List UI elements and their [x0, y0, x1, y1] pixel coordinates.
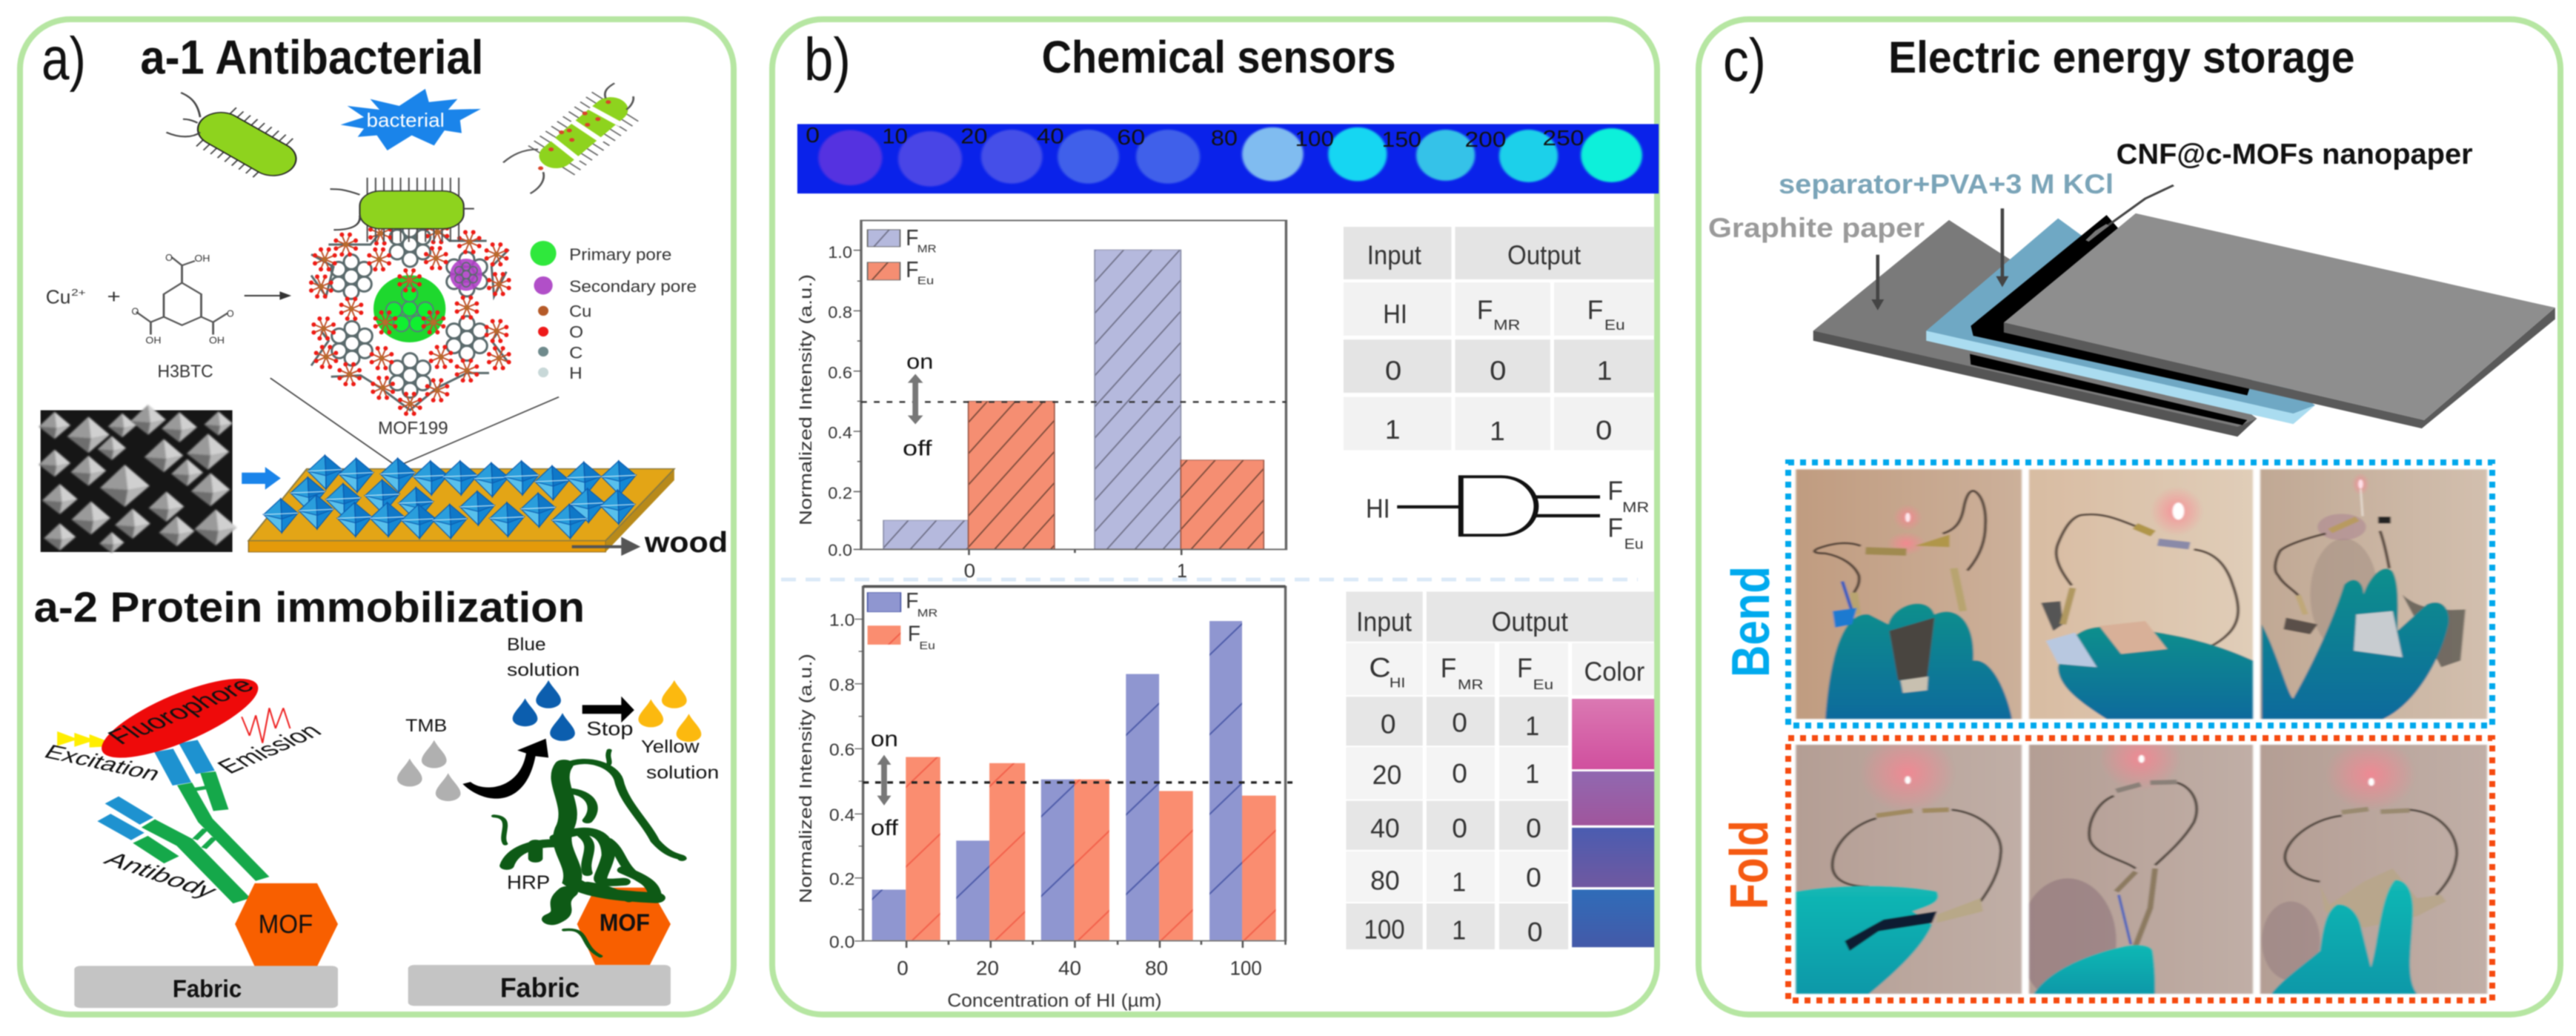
bar chart: logic outputs at HI 0 and 1: 0.4 [828, 424, 852, 442]
shape: Fabric left: Fabric [173, 975, 242, 1003]
image: fluorescence well strip with concentrations: 60 [1117, 125, 1145, 149]
reaction: Cu2+ plus H3BTC: OH [194, 253, 210, 264]
table: concentration truth table with color swatches: 1 [1452, 914, 1466, 945]
bar chart: logic outputs at HI 0 and 1: 0.6 [828, 363, 852, 382]
group: lower sensor content [829, 560, 1654, 1011]
reaction: Cu2+ plus H3BTC: Cu [46, 287, 70, 308]
icon: bacterium on MOF [330, 189, 474, 230]
legend: pore and atom key: Secondary pore [569, 277, 697, 296]
bar chart: logic outputs at HI 0 and 1: off [903, 436, 932, 460]
table: concentration truth table with color swatches: 80 [1370, 865, 1400, 895]
image: fluorescence well strip with concentrations [797, 123, 1659, 193]
table: two-state truth table: HI [1383, 299, 1407, 329]
icon: bacterial burst star: bacterial [367, 110, 445, 131]
heading: Chemical sensors: Chemical sensors [1042, 31, 1396, 82]
table: concentration truth table with color swatches: 20 [1372, 760, 1401, 790]
image: fluorescence well strip with concentrations: 200 [1464, 127, 1506, 151]
bar chart: outputs versus HI concentration: Eu [919, 640, 935, 652]
label: Excitation: Excitation [40, 740, 165, 785]
bar chart: outputs versus HI concentration: 0.6 [829, 740, 854, 760]
photo group: fold demonstrations [1796, 725, 2487, 1003]
section: a-2 Protein immobilization [34, 583, 719, 1008]
bar chart: outputs versus HI concentration: off [871, 816, 898, 840]
bar chart: outputs versus HI concentration: 0 [897, 957, 909, 980]
table: concentration truth table with color swatches: 0 [1452, 708, 1467, 738]
bar chart: logic outputs at HI 0 and 1: F [906, 225, 918, 250]
diagram: logic gate: MR [1622, 499, 1649, 515]
bar chart: outputs versus HI concentration: 100 [1230, 957, 1262, 980]
table: concentration truth table with color swatches: 1 [1525, 711, 1539, 741]
table: concentration truth table with color swatches: F [1517, 652, 1533, 683]
icon: excitation arrows [57, 731, 119, 748]
bar chart: outputs versus HI concentration: Concentration of HI (µm) [947, 990, 1162, 1011]
bar chart: logic outputs at HI 0 and 1: 0.8 [828, 303, 852, 322]
bar chart: outputs versus HI concentration: 0.0 [829, 933, 854, 952]
image: fluorescence well strip with concentrations: 10 [882, 124, 908, 148]
diagram: layered supercapacitor stack [1813, 185, 2555, 436]
table: two-state truth table: Eu [1604, 317, 1625, 333]
diagram: logic gate: Eu [1624, 536, 1644, 552]
table: two-state truth table: 1 [1597, 356, 1612, 386]
label: Antibody: Antibody [99, 848, 224, 902]
image: fluorescence well strip with concentrations: 100 [1295, 127, 1334, 150]
panel: a) antibacterial and protein immobilization [20, 19, 734, 1015]
panel: b) chemical sensors [772, 19, 1659, 1015]
arrow: curved TMB to blue solution [462, 739, 548, 799]
table: two-state truth table: F [1477, 295, 1493, 325]
shape: Fabric right: Fabric [500, 973, 580, 1003]
bar chart: logic outputs at HI 0 and 1: on [906, 349, 933, 373]
table: two-state truth table: Output [1507, 240, 1581, 270]
legend: pore and atom key: O [569, 323, 583, 342]
table: concentration truth table with color swatches: C [1369, 652, 1391, 683]
shape: MOF hexagon left: MOF [259, 909, 313, 938]
group: device schematic [1813, 33, 2555, 436]
bar chart: outputs versus HI concentration: 0.8 [829, 676, 854, 694]
label: Yellow solution with drops: solution [646, 763, 719, 783]
label: TMB with grey drops: TMB [405, 715, 447, 735]
label: TMB with grey drops [397, 715, 461, 801]
bar chart: outputs versus HI concentration: 1.0 [829, 611, 854, 630]
photo: bend 3 [2260, 469, 2487, 719]
shape: MOF hexagon left [235, 883, 338, 966]
bar chart: outputs versus HI concentration: F [906, 588, 918, 613]
table: concentration truth table with color swatches: 0 [1452, 758, 1467, 788]
label: Blue solution with drops: Blue [507, 635, 546, 654]
legend: pore and atom key: C [569, 344, 582, 362]
legend: pore and atom key: H [569, 364, 582, 382]
table: concentration truth table with color swatches: 0 [1452, 813, 1467, 843]
reaction: Cu2+ plus H3BTC: H3BTC [158, 362, 213, 382]
legend: pore and atom key: Primary pore [569, 245, 671, 264]
table: concentration truth table with color swatches: MR [1458, 677, 1483, 692]
label: Blue solution with drops: solution [507, 660, 580, 680]
diagram: antibody with fluorophore: Fluorophore [102, 674, 261, 748]
shape: Fabric right [408, 965, 671, 1006]
frame: Fold dotted outline [1788, 738, 2492, 1000]
reaction: Cu2+ plus H3BTC: O [227, 309, 234, 319]
photo: fold 2 [2028, 744, 2254, 995]
image: fluorescence well strip with concentrations: 20 [960, 124, 987, 148]
table: two-state truth table [1344, 227, 1654, 450]
axis title: lower chart y axis: Normalized Intensity (a.u.) [796, 654, 815, 903]
bar chart: outputs versus HI concentration: 0.4 [829, 806, 854, 825]
reaction: Cu2+ plus H3BTC: OH [145, 335, 161, 346]
diagram: logic gate: F [1607, 513, 1623, 543]
bar chart: logic outputs at HI 0 and 1: 0.2 [828, 484, 852, 502]
diagram: MOF crystals on wood board: wood [644, 526, 728, 558]
icon: ruptured bacterium [503, 83, 634, 193]
table: concentration truth table with color swatches: 0 [1526, 862, 1541, 892]
table: two-state truth table: 0 [1490, 356, 1506, 386]
diagram: logic gate: F [1607, 476, 1623, 506]
panel label b): b) [804, 26, 851, 93]
arrow: Stop: Stop [586, 717, 633, 740]
arrow: reaction to MOF199 [245, 293, 289, 299]
label: Fold: Fold [1720, 820, 1779, 909]
table: concentration truth table with color swatches: 1 [1452, 867, 1466, 897]
reaction: Cu2+ plus H3BTC [46, 253, 234, 382]
label: Yellow solution with drops [638, 680, 719, 783]
label: Yellow solution with drops: Yellow [641, 737, 700, 757]
table: two-state truth table: MR [1493, 317, 1520, 333]
bar chart: logic outputs at HI 0 and 1: 0.0 [828, 541, 852, 559]
table: concentration truth table with color swatches [1346, 591, 1654, 949]
icon: bacterial burst star [340, 89, 481, 150]
bar chart: logic outputs at HI 0 and 1 [828, 221, 1286, 559]
table: two-state truth table: 1 [1490, 416, 1505, 446]
shape: MOF hexagon right [577, 888, 671, 965]
table: concentration truth table with color swatches: 100 [1364, 914, 1405, 945]
bar chart: outputs versus HI concentration [829, 586, 1292, 1011]
diagram: MOF199 crystal structure [309, 220, 511, 416]
image: fluorescence well strip with concentrations: 150 [1382, 127, 1421, 151]
bar chart: outputs versus HI concentration: on [871, 727, 898, 751]
legend: pore and atom key [531, 241, 697, 382]
table: concentration truth table with color swatches: 40 [1370, 813, 1400, 843]
table: concentration truth table with color swatches: F [1441, 652, 1456, 683]
image: fluorescence well strip with concentrations: 250 [1543, 126, 1584, 150]
label: separator+PVA+3 M KCl: separator+PVA+3 M KCl [1779, 169, 2114, 199]
diagram: MOF crystals on wood board [248, 378, 728, 558]
shape: Fabric left [74, 966, 338, 1008]
shape: MOF hexagon right: MOF [600, 909, 650, 936]
table: concentration truth table with color swatches: Color [1584, 657, 1644, 687]
section: a-1 Antibacterial [39, 30, 728, 558]
panel label c): c) [1723, 27, 1766, 94]
table: concentration truth table with color swatches: 0 [1527, 917, 1543, 947]
table: two-state truth table: 1 [1385, 415, 1401, 445]
bar chart: outputs versus HI concentration: F [908, 622, 920, 646]
photo: fold 1 [1796, 733, 2022, 994]
frame: Bend dotted outline [1788, 462, 2492, 725]
table: concentration truth table with color swatches: 0 [1526, 813, 1541, 843]
arrow: SEM to wood [242, 467, 281, 490]
group: lower sensor content: 1 [1177, 560, 1187, 581]
table: concentration truth table with color swatches: 0 [1381, 709, 1396, 740]
reaction: Cu2+ plus H3BTC: OH [209, 335, 225, 346]
reaction: Cu2+ plus H3BTC: O [165, 253, 173, 263]
photo group: bend demonstrations [1796, 469, 2487, 719]
bar chart: outputs versus HI concentration: MR [917, 607, 937, 620]
label: MOF199: MOF199 [378, 418, 448, 439]
diagram: logic gate [1366, 476, 1649, 552]
group: upper sensor content [797, 31, 1659, 559]
bar chart: outputs versus HI concentration: 40 [1058, 957, 1081, 980]
panel label a): a) [42, 25, 86, 93]
table: concentration truth table with color swatches: HI [1390, 676, 1405, 691]
diagram: logic gate: HI [1366, 494, 1390, 524]
bar chart: outputs versus HI concentration: 0.2 [829, 870, 854, 889]
image: SEM micrograph of octahedral crystals [39, 405, 237, 553]
axis labels: upper chart x axis [964, 560, 1187, 581]
table: two-state truth table: F [1587, 295, 1603, 325]
bar chart: logic outputs at HI 0 and 1: F [906, 257, 918, 282]
table: concentration truth table with color swatches: Input [1356, 606, 1412, 637]
label: HRP: HRP [507, 871, 550, 893]
table: concentration truth table with color swatches: 1 [1525, 759, 1539, 789]
heading: a-1 Antibacterial: a-1 Antibacterial [140, 30, 483, 84]
table: two-state truth table: Input [1367, 240, 1421, 270]
bar chart: logic outputs at HI 0 and 1: 1.0 [828, 243, 852, 262]
image: fluorescence well strip with concentrations: 0 [806, 123, 820, 147]
photo: fold 3 [2260, 738, 2487, 994]
axis labels: upper chart x axis: 0 [964, 560, 975, 581]
image: fluorescence well strip with concentrations: 40 [1037, 124, 1064, 148]
reaction: Cu2+ plus H3BTC: + [107, 287, 121, 308]
table: concentration truth table with color swatches: Output [1492, 606, 1568, 637]
arrow: Stop [582, 697, 634, 740]
bar chart: logic outputs at HI 0 and 1: Eu [917, 275, 934, 287]
icon: emission wave [242, 708, 290, 743]
table: two-state truth table: 0 [1596, 416, 1612, 445]
diagram: antibody with fluorophore [82, 666, 279, 900]
label: Blue solution with drops [507, 635, 580, 741]
photo: bend 1 [1796, 469, 2022, 719]
bar chart: logic outputs at HI 0 and 1: MR [917, 243, 937, 255]
image: fluorescence well strip with concentrations: 80 [1211, 126, 1238, 150]
label: Bend: Bend [1722, 566, 1781, 677]
reaction: Cu2+ plus H3BTC: O [131, 307, 139, 317]
label: Graphite paper: Graphite paper [1708, 213, 1925, 243]
reaction: Cu2+ plus H3BTC: 2+ [71, 288, 86, 298]
axis title: upper chart y axis: Normalized Intensity (a.u.) [796, 274, 815, 525]
bar chart: outputs versus HI concentration: 80 [1145, 957, 1168, 980]
bar chart: outputs versus HI concentration: 20 [976, 957, 999, 980]
icon: HRP protein ribbon [494, 751, 682, 956]
heading: a-2 Protein immobilization: a-2 Protein immobilization [34, 583, 585, 631]
table: two-state truth table: 0 [1385, 356, 1401, 386]
table: concentration truth table with color swatches: Eu [1533, 677, 1553, 692]
legend: pore and atom key: Cu [569, 302, 591, 321]
panel: c) electric energy storage [1699, 19, 2560, 1015]
photo: bend 2 [2029, 469, 2253, 719]
label: Emission: Emission [210, 720, 328, 777]
icon: intact bacterium [166, 93, 278, 161]
